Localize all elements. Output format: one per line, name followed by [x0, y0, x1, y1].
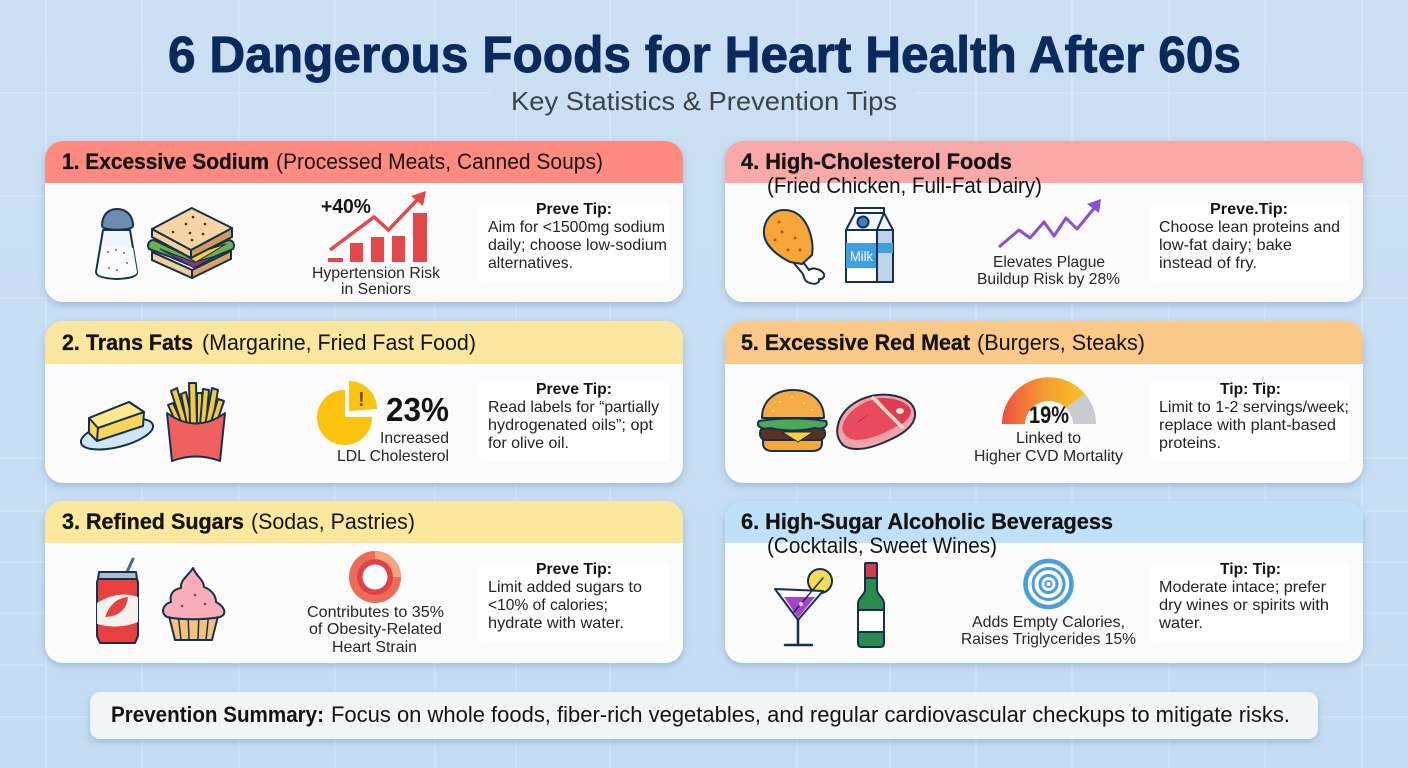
- stat label: Raises Triglycerides 15%: [961, 631, 1136, 648]
- icon: cocktail: [775, 569, 832, 645]
- stat label: [974, 430, 1123, 465]
- chart: concentric target: [1026, 561, 1072, 607]
- tip box: daily; choose low-sodium: [488, 237, 667, 254]
- panel: high-cholesterol foods: [725, 141, 1363, 302]
- stat label: [307, 604, 444, 656]
- panel: high-sugar alcoholic beverages: [725, 501, 1363, 663]
- stat label: [337, 430, 449, 465]
- icon: milk carton: Milk: [850, 248, 874, 264]
- tip box: [478, 381, 671, 462]
- chart: pie 23 percent: 23%: [386, 391, 449, 428]
- icon: sandwich: [148, 208, 234, 278]
- chart: rising hypertension risk bars: +40%: [321, 196, 371, 218]
- stat label: Contributes to 35%: [307, 604, 444, 621]
- tip box: alternatives.: [488, 255, 573, 272]
- tip box: instead of fry.: [1159, 255, 1257, 272]
- heading: (Processed Meats, Canned Soups): [276, 149, 603, 174]
- tip box: Preve Tip:: [536, 381, 612, 398]
- stat label: [961, 614, 1136, 648]
- tip box: Limit added sugars to: [488, 579, 642, 596]
- tip box: hydrate with water.: [488, 615, 624, 632]
- tip box: Preve Tip:: [536, 201, 612, 218]
- title: 6 Dangerous Foods for Heart Health After 60s: [168, 26, 1241, 83]
- chart: pie 23 percent: [317, 381, 449, 445]
- icon: soda can: [97, 559, 138, 643]
- panel: refined sugars: [45, 501, 683, 663]
- tip box: low-fat dairy; bake: [1159, 237, 1292, 254]
- icon: butter: [78, 402, 156, 456]
- tip box: [478, 201, 671, 282]
- stat label: Buildup Risk by 28%: [977, 271, 1120, 288]
- chart: gauge 19 percent: [1002, 377, 1096, 429]
- prevention summary bar: [90, 692, 1318, 739]
- heading: [741, 330, 1145, 355]
- tip box: water.: [1158, 615, 1203, 632]
- heading: 6. High-Sugar Alcoholic Beveragess: [741, 509, 1113, 534]
- heading: (Burgers, Steaks): [977, 330, 1145, 355]
- tip box: Read labels for “partially: [488, 399, 659, 416]
- stat label: Adds Empty Calories,: [972, 614, 1125, 631]
- icon: salt shaker: [96, 209, 137, 279]
- tip box: Tip: Tip:: [1220, 561, 1281, 578]
- heading: [741, 509, 1113, 558]
- heading: [62, 330, 476, 355]
- prevention summary bar: Prevention Summary:: [111, 702, 324, 727]
- heading: [62, 509, 415, 534]
- heading: 1. Excessive Sodium: [62, 149, 269, 174]
- heading: (Fried Chicken, Full-Fat Dairy): [767, 173, 1042, 198]
- icon: fried chicken: [764, 210, 824, 284]
- stat label: LDL Cholesterol: [337, 448, 449, 465]
- heading: (Cocktails, Sweet Wines): [767, 533, 997, 558]
- stat label: [977, 254, 1120, 288]
- tip box: [1150, 201, 1351, 282]
- tip box: dry wines or spirits with: [1159, 597, 1329, 614]
- tip box: replace with plant-based: [1159, 417, 1336, 434]
- tip box: proteins.: [1159, 435, 1221, 452]
- stat label: Linked to: [1016, 430, 1081, 447]
- tip box: [1150, 381, 1351, 462]
- heading: 4. High-Cholesterol Foods: [741, 149, 1012, 174]
- icon: steak: [837, 395, 915, 449]
- heading: 3. Refined Sugars: [62, 509, 244, 534]
- chart: rising hypertension risk bars: [321, 191, 427, 262]
- tip box: Choose lean proteins and: [1159, 219, 1340, 236]
- tip box: Preve.Tip:: [1210, 201, 1288, 218]
- stat label: Increased: [380, 430, 449, 447]
- tip box: for olive oil.: [488, 435, 569, 452]
- tip box: [1150, 561, 1351, 642]
- panel: excessive red meat: [725, 321, 1363, 483]
- icon: burger: [758, 390, 827, 451]
- chart: pie 23 percent: !: [358, 389, 365, 411]
- icon: cupcake: [163, 568, 224, 640]
- chart: donut: [349, 551, 401, 603]
- tip box: hydrogenated oils”; opt: [488, 417, 654, 434]
- stat label: in Seniors: [341, 281, 411, 298]
- stat label: [312, 265, 441, 298]
- heading: [741, 149, 1042, 198]
- heading: 5. Excessive Red Meat: [741, 330, 971, 355]
- tip box: <10% of calories;: [488, 597, 608, 614]
- stat label: Elevates Plague: [993, 254, 1105, 271]
- panel: excessive sodium: [45, 141, 683, 302]
- tip box: Limit to 1-2 servings/week;: [1159, 399, 1349, 416]
- tip box: Preve Tip:: [536, 561, 612, 578]
- heading: (Margarine, Fried Fast Food): [202, 330, 476, 355]
- stat label: of Obesity-Related: [309, 621, 442, 638]
- tip box: [478, 561, 671, 642]
- panel: trans fats: [45, 321, 683, 483]
- heading: (Sodas, Pastries): [251, 509, 415, 534]
- chart: gauge 19 percent: 19%: [1029, 402, 1069, 429]
- stat label: Hypertension Risk: [312, 265, 441, 282]
- chart: rising plaque risk line: [999, 199, 1101, 247]
- icon: french fries: [167, 383, 225, 461]
- icon: milk carton: [846, 208, 893, 282]
- stat label: Higher CVD Mortality: [974, 448, 1123, 465]
- tip box: Aim for <1500mg sodium: [488, 219, 665, 236]
- subtitle: Key Statistics & Prevention Tips: [511, 86, 897, 116]
- icon: wine bottle: [858, 563, 884, 647]
- tip box: Moderate intace; prefer: [1159, 579, 1327, 596]
- heading: 2. Trans Fats: [62, 330, 193, 355]
- stat label: Heart Strain: [332, 639, 417, 656]
- tip box: Tip: Tip:: [1220, 381, 1281, 398]
- heading: [62, 149, 603, 174]
- prevention summary bar: Focus on whole foods, fiber-rich vegetables, and regular cardiovascular checkups to mitigate risks.: [331, 702, 1290, 727]
